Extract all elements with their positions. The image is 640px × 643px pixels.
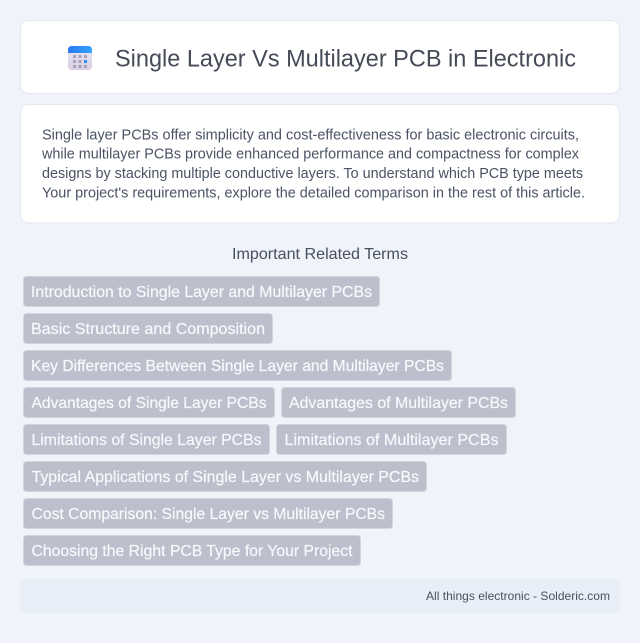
text block: summary: while multilayer PCBs provide enhanced performance and compactness for complex <box>41 147 580 163</box>
tag: key differences: Key Differences Between Single Layer and Multilayer PCBs <box>31 358 444 375</box>
heading: related terms: Important Related Terms <box>232 246 408 263</box>
tag: introduction: Introduction to Single Layer and Multilayer PCBs <box>31 284 372 301</box>
tag: typical applications <box>24 462 426 492</box>
text block: summary: Single layer PCBs offer simplicity and cost-effectiveness for basic electronic circuits, <box>42 127 579 143</box>
tag: choosing type: Choosing the Right PCB Type for Your Project <box>32 543 353 560</box>
tag: cost comparison <box>24 498 392 528</box>
text block: summary: Your project's requirements, explore the detailed comparison in the rest of this article. <box>42 185 585 201</box>
footer: All things electronic - Solderic.com <box>426 589 610 603</box>
title: Single Layer Vs Multilayer PCB in Electronic <box>115 46 576 72</box>
tag: limitations single: Limitations of Single Layer PCBs <box>32 432 262 449</box>
tag: advantages single: Advantages of Single Layer PCBs <box>32 395 266 412</box>
tag: key differences <box>24 350 452 380</box>
tag: basic structure <box>24 314 272 344</box>
panel: related term tags <box>24 276 516 566</box>
tag: advantages multilayer: Advantages of Multilayer PCBs <box>289 395 508 412</box>
tag: typical applications: Typical Applications of Single Layer vs Multilayer PCBs <box>32 469 419 486</box>
text block: summary: designs by stacking multiple conductive layers. To understand which PCB type meets <box>42 166 583 182</box>
text block: summary <box>41 127 585 201</box>
tag: limitations multilayer: Limitations of Multilayer PCBs <box>284 432 498 449</box>
tag: choosing type <box>24 536 360 566</box>
tag: advantages multilayer <box>282 388 516 418</box>
icon: calendar grid <box>68 46 92 70</box>
footer <box>20 579 620 613</box>
tag: limitations single <box>24 424 270 454</box>
tag: limitations multilayer <box>276 424 506 454</box>
tag: cost comparison: Cost Comparison: Single Layer vs Multilayer PCBs <box>32 506 385 523</box>
tag: introduction <box>24 276 380 306</box>
panel: title header <box>20 20 620 94</box>
tag: basic structure: Basic Structure and Composition <box>31 321 265 338</box>
tag: advantages single <box>24 388 274 418</box>
panel: summary paragraph <box>20 104 620 223</box>
